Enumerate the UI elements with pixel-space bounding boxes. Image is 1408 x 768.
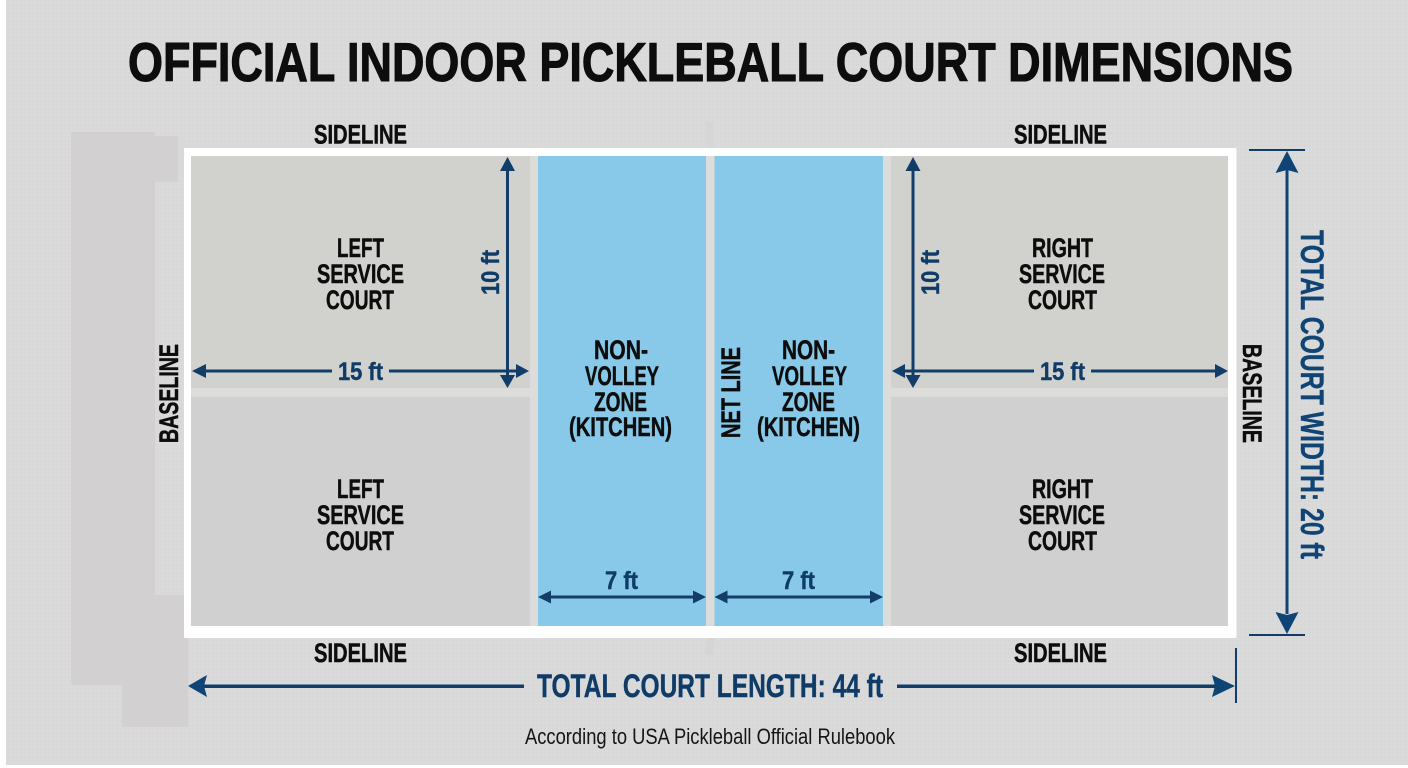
text: left kitchen: NON- (594, 335, 648, 365)
dimension: left 7 ft: 7 ft (605, 567, 639, 595)
dimension: left 15 ft: 15 ft (338, 358, 384, 386)
label: top left sideline: SIDELINE (314, 120, 407, 150)
label: bottom right sideline: SIDELINE (1014, 638, 1107, 668)
label: bottom left sideline: SIDELINE (314, 638, 407, 668)
arrow: left 15 ft (192, 364, 529, 378)
dimension: right 15 ft: 15 ft (1040, 358, 1086, 386)
text: upper right service court (1019, 233, 1105, 315)
text: upper left service court: COURT (326, 285, 394, 315)
text: upper right service court: COURT (1028, 285, 1097, 315)
panel: left kitchen (538, 156, 706, 626)
text: lower left service court (317, 474, 404, 556)
text: left kitchen: (KITCHEN) (569, 412, 672, 442)
text: lower right service court: COURT (1028, 526, 1097, 556)
arrow: right 7 ft (714, 590, 883, 604)
text: right kitchen: (KITCHEN) (757, 412, 860, 442)
arrow: total court width (1249, 149, 1305, 636)
text: upper right service court: RIGHT (1032, 233, 1093, 263)
label: net line: NET LINE (716, 347, 746, 438)
text: upper left service court: LEFT (337, 233, 384, 263)
label: right baseline: BASELINE (1237, 344, 1267, 443)
dimension: total court width: TOTAL COURT WIDTH: 20 ft (1294, 230, 1330, 559)
text: upper left service court (317, 233, 404, 315)
dimension: left 10 ft: 10 ft (477, 249, 505, 295)
arrow: right 10 ft (906, 157, 920, 388)
label: left baseline: BASELINE (154, 344, 184, 443)
panel: lower right service court (891, 397, 1228, 626)
arrow: left 7 ft (538, 590, 706, 604)
text: lower left service court: COURT (326, 526, 394, 556)
panel: lower left service court (191, 397, 530, 626)
text: upper left service court: SERVICE (317, 259, 404, 289)
dimension: right 7 ft: 7 ft (782, 567, 816, 595)
text: left kitchen (569, 335, 672, 442)
court white outline (184, 148, 1236, 638)
arrow: left 10 ft (500, 157, 515, 388)
text: right kitchen: ZONE (782, 387, 835, 417)
text: upper right service court: SERVICE (1019, 259, 1105, 289)
text: lower left service court: LEFT (337, 474, 384, 504)
arrow: right 15 ft (892, 364, 1228, 378)
text: left kitchen: VOLLEY (585, 361, 659, 391)
label: top right sideline: SIDELINE (1014, 120, 1107, 150)
text: lower left service court: SERVICE (317, 500, 404, 530)
dimension: total court length: TOTAL COURT LENGTH: 44 ft (537, 668, 883, 704)
text: right kitchen (757, 335, 860, 442)
dimension: right 10 ft: 10 ft (917, 249, 945, 295)
arrow: total court length (188, 648, 1237, 703)
text: right kitchen: VOLLEY (772, 361, 847, 391)
footer source note: According to USA Pickleball Official Rulebook (525, 724, 896, 749)
text: lower right service court: SERVICE (1019, 500, 1105, 530)
panel: upper right service court (891, 156, 1228, 388)
court surface gaps (191, 156, 1228, 626)
text: lower right service court: RIGHT (1032, 474, 1093, 504)
panel: right kitchen (714, 156, 883, 626)
panel: court (184, 148, 1236, 638)
text: lower right service court (1019, 474, 1105, 556)
text: right kitchen: NON- (782, 335, 835, 365)
panel: upper left service court (191, 156, 530, 388)
text: left kitchen: ZONE (594, 387, 647, 417)
